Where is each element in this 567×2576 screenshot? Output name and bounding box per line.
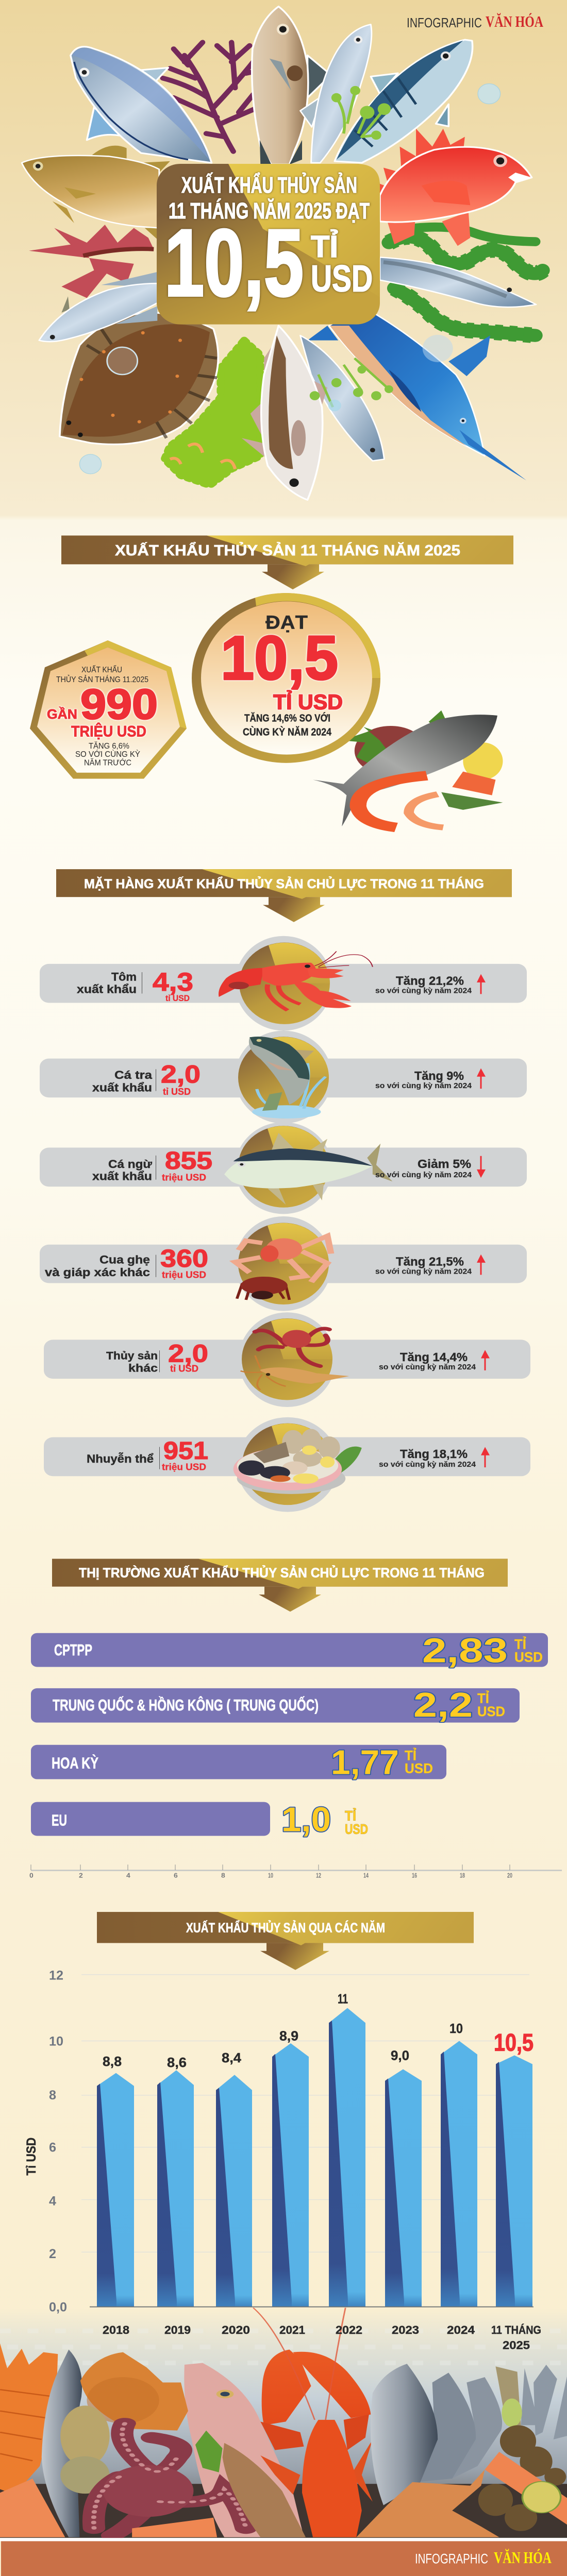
bar 2022 [329, 1991, 365, 2336]
bar: EU [31, 1800, 368, 1839]
row: cua ghẹ và giáp xác khác: 360 [160, 1244, 208, 1272]
heading banner: xuất khẩu thủy sản 11 tháng năm 2025: XUẤT KHẨU THỦY SẢN 11 THÁNG NĂM 2025 [115, 541, 460, 559]
illustration: fish, shrimp and lemon [313, 710, 503, 827]
slim silver top [300, 24, 372, 163]
bar: Trung Quốc và Hồng Kông: 2,2 [413, 1685, 473, 1724]
row: thủy sản khác [44, 1312, 530, 1407]
row: cua ghẹ và giáp xác khác: so với cùng kỳ năm 2024 [375, 1267, 472, 1276]
row: thủy sản khác: so với cùng kỳ năm 2024 [379, 1363, 476, 1371]
arrow up [477, 1255, 486, 1275]
big circle: đạt 10,5 tỉ USD: CÙNG KỲ NĂM 2024 [243, 726, 332, 738]
row: tôm xuất khẩu [40, 936, 527, 1031]
arrow up [477, 1069, 486, 1089]
bar chart: thị trường [29, 1631, 562, 1879]
logo: Infographic Văn Hóa: INFOGRAPHIC [407, 15, 482, 30]
bottom seafood photo [0, 2308, 567, 2538]
oysters [60, 2405, 110, 2466]
title card: TỈ [311, 229, 338, 264]
icon: crabs [235, 1236, 331, 1300]
octopus [94, 2424, 246, 2535]
bar 2021: 8,9 [279, 2028, 298, 2043]
heptagon: tháng 11.2025 gần 990 triệu USD: XUẤT KHẨU [81, 665, 122, 674]
spotted fish [242, 338, 327, 461]
arrow down [477, 1156, 486, 1178]
y axis grid and labels: 2 [49, 2246, 56, 2261]
axis: 4 [126, 1872, 130, 1879]
heading banner: mặt hàng xuất khẩu [56, 869, 512, 922]
icon: tuna [224, 1133, 392, 1205]
row: tôm xuất khẩu: 4,3 [153, 968, 193, 996]
bar: EU: 1,0 [281, 1800, 331, 1839]
arrow up [481, 1350, 490, 1370]
arrow up [477, 974, 486, 994]
bar: CPTPP: USD [514, 1650, 543, 1665]
y axis grid and labels: 0,0 [49, 2300, 67, 2314]
bar: EU: USD [345, 1822, 368, 1837]
bar 2023: 2023 [392, 2324, 419, 2336]
heptagon: tháng 11.2025 gần 990 triệu USD: TRIỆU USD [71, 722, 146, 740]
bar: CPTPP [31, 1631, 548, 1670]
bar 2021: 2021 [279, 2324, 305, 2336]
lime sprig [331, 86, 391, 140]
herbs [195, 2431, 223, 2472]
row: cua ghẹ và giáp xác khác: Cua ghẹ [99, 1253, 150, 1266]
y axis grid and labels [24, 1968, 529, 2314]
axis: 20 [507, 1872, 512, 1879]
salmon mid [132, 2518, 217, 2537]
logo: Infographic Văn Hóa: VĂN HÓA [486, 13, 543, 30]
row: thủy sản khác: Tăng 14,4% [400, 1351, 468, 1364]
bar: Hoa Kỳ: TỈ [405, 1748, 416, 1764]
row: nhuyễn thể [44, 1417, 530, 1512]
antennae [253, 2308, 345, 2420]
arrow up [481, 1447, 490, 1467]
heading banner: thị trường xuất khẩu: THỊ TRƯỜNG XUẤT KHẨU THỦY SẢN CHỦ LỰC TRONG 11 THÁNG [79, 1565, 485, 1580]
bar: EU: TỈ [345, 1808, 356, 1824]
bar 2024 [441, 2021, 477, 2336]
bar 11 tháng 2025: 2025 [503, 2339, 530, 2352]
dark base [0, 2484, 567, 2537]
bar: Hoa Kỳ: 1,77 [331, 1743, 399, 1782]
icon: shellfish bowl [234, 1429, 362, 1494]
bar 2022: 2022 [336, 2324, 362, 2336]
row: nhuyễn thể: 951 [163, 1436, 208, 1464]
bar: Trung Quốc và Hồng Kông: TỈ [477, 1690, 489, 1706]
lime seaweed [164, 341, 260, 485]
axis: 16 [412, 1872, 417, 1879]
seaweed green right [389, 227, 543, 335]
title card: USD [311, 258, 373, 300]
bar: Hoa Kỳ: HOA KỲ [52, 1754, 98, 1772]
row: cá ngừ xuất khẩu: Cá ngừ [108, 1158, 153, 1171]
bar: Hoa Kỳ [31, 1743, 446, 1782]
red fish [376, 129, 465, 199]
pink fish [184, 2363, 304, 2537]
bar: Trung Quốc và Hồng Kông: USD [477, 1704, 505, 1720]
bar: Trung Quốc và Hồng Kông: TRUNG QUỐC & HỒNG KÔNG ( TRUNG QUỐC) [53, 1696, 319, 1714]
bar 11 tháng 2025: 11 THÁNG [491, 2323, 541, 2336]
icon: octopus and squid [241, 1329, 349, 1390]
title card [157, 164, 380, 325]
heptagon: tháng 11.2025 gần 990 triệu USD: TĂNG 6,6% [89, 741, 129, 751]
bar 2020 [216, 2050, 252, 2336]
marlin [308, 326, 338, 341]
panel: hero illustration and title [22, 7, 543, 500]
bar 2024: 10 [449, 2021, 463, 2036]
y axis grid and labels: 12 [49, 1968, 63, 1982]
icon: lobster [219, 951, 373, 1010]
bar 11 tháng 2025 [491, 2029, 541, 2352]
column chart: xuất khẩu qua các năm [24, 1968, 541, 2352]
title card: XUẤT KHẨU THỦY SẢN [181, 172, 357, 197]
heptagon: tháng 11.2025 gần 990 triệu USD: SO VỚI CÙNG KỲ [75, 750, 140, 759]
logo: Infographic Văn Hóa [407, 13, 543, 30]
bar 2019 [157, 2055, 194, 2336]
row: nhuyễn thể: Nhuyễn thể [87, 1452, 154, 1466]
bar 2020: 8,4 [222, 2050, 242, 2065]
bar: EU: EU [52, 1811, 67, 1829]
y axis grid and labels: Tỉ USD [24, 2138, 39, 2176]
row: tôm xuất khẩu: so với cùng kỳ năm 2024 [375, 987, 472, 995]
barracuda [380, 257, 536, 307]
bar 2018: 8,8 [103, 2054, 122, 2069]
y axis grid and labels: 4 [49, 2194, 56, 2208]
bar 2019: 2019 [164, 2324, 191, 2336]
y axis grid and labels: 6 [49, 2140, 56, 2155]
brown fish [223, 2443, 306, 2537]
small fish and lime [495, 2366, 521, 2425]
axis: 18 [460, 1872, 465, 1879]
title card: 11 THÁNG NĂM 2025 ĐẠT [169, 198, 370, 224]
silver fishes right [452, 2377, 502, 2479]
bar 2019: 8,6 [167, 2055, 187, 2070]
row: tôm xuất khẩu: Tôm [111, 970, 137, 984]
row: cá tra xuất khẩu: so với cùng kỳ năm 2024 [375, 1082, 472, 1090]
row: cá ngừ xuất khẩu: Giảm 5% [418, 1158, 471, 1171]
sprigs lower [310, 366, 393, 400]
row: cá tra xuất khẩu: Tăng 9% [414, 1070, 464, 1083]
row: tôm xuất khẩu: xuất khẩu [77, 983, 137, 996]
shrimp stack [0, 2343, 58, 2495]
blue slim fish [102, 272, 157, 324]
bar 2022: 11 [338, 1991, 348, 2006]
row: thủy sản khác: 2,0 [168, 1339, 208, 1367]
axis: 12 [316, 1872, 321, 1879]
heading banner: mặt hàng xuất khẩu: MẶT HÀNG XUẤT KHẨU THỦY SẢN CHỦ LỰC TRONG 11 THÁNG [84, 876, 484, 891]
slim silver bottom [300, 335, 384, 461]
axis: 6 [174, 1872, 178, 1879]
heading banner: qua các năm: XUẤT KHẨU THỦY SẢN QUA CÁC NĂM [186, 1920, 385, 1935]
row: cua ghẹ và giáp xác khác: và giáp xác khác [45, 1266, 150, 1279]
row: cua ghẹ và giáp xác khác [40, 1216, 527, 1311]
bar 11 tháng 2025: 10,5 [494, 2029, 533, 2056]
row: cá ngừ xuất khẩu [40, 1122, 527, 1214]
purple coral [163, 42, 270, 151]
row: cá ngừ xuất khẩu: xuất khẩu [92, 1170, 152, 1183]
tuna top-left [71, 47, 212, 163]
title card: 10,5 [164, 210, 304, 316]
y axis grid and labels: 10 [49, 2034, 63, 2048]
footer bar: INFOGRAPHIC [415, 2551, 488, 2567]
crab [80, 2352, 188, 2431]
row: nhuyễn thể: triệu USD [162, 1462, 206, 1472]
row: cua ghẹ và giáp xác khác: triệu USD [162, 1270, 206, 1280]
axis: 2 [79, 1872, 83, 1879]
big circle: đạt 10,5 tỉ USD: ĐẠT [265, 612, 308, 633]
big circle: đạt 10,5 tỉ USD: 10,5 [221, 624, 338, 693]
heptagon: tháng 11.2025 gần 990 triệu USD: GẦN [47, 707, 77, 722]
row: cá tra xuất khẩu: Cá tra [114, 1069, 153, 1082]
row: thủy sản khác: Thủy sản [106, 1349, 158, 1362]
bar 2023: 9,0 [391, 2048, 409, 2063]
row: cá tra xuất khẩu [40, 1031, 527, 1124]
heading banner: xuất khẩu thủy sản 11 tháng năm 2025 [61, 535, 513, 589]
row: thủy sản khác: tỉ USD [170, 1364, 198, 1374]
big circle: đạt 10,5 tỉ USD: TỈ USD [273, 690, 343, 714]
row: cá tra xuất khẩu: tỉ USD [163, 1087, 191, 1097]
silver fish left [42, 2350, 82, 2537]
axis: 14 [363, 1872, 369, 1879]
axis: 0 [29, 1872, 34, 1879]
row: cá tra xuất khẩu: 2,0 [161, 1060, 201, 1088]
row: cua ghẹ và giáp xác khác: Tăng 21,5% [396, 1255, 464, 1268]
lobster claws [262, 2350, 311, 2425]
bar 2021 [272, 2028, 309, 2336]
bar: CPTPP: CPTPP [54, 1641, 92, 1659]
tan fish [252, 7, 331, 164]
heptagon: tháng 11.2025 gần 990 triệu USD: 990 [80, 680, 158, 728]
row: cá ngừ xuất khẩu: 855 [165, 1146, 212, 1174]
row: tôm xuất khẩu: tỉ USD [165, 994, 190, 1003]
heading banner: thị trường xuất khẩu [52, 1559, 508, 1612]
golden fish [89, 146, 170, 241]
bar: CPTPP: 2,83 [422, 1631, 508, 1670]
fish and seaweed wreath [22, 7, 543, 500]
axis: 8 [221, 1872, 225, 1879]
heptagon: tháng 11.2025 gần 990 triệu USD: THỦY SẢN THÁNG 11.2025 [56, 675, 148, 684]
red seaweed [29, 225, 154, 298]
bar: CPTPP: TỈ [514, 1636, 526, 1652]
salmon right [485, 2452, 567, 2525]
row: thủy sản khác: khác [128, 1362, 158, 1374]
bar 2024: 2024 [447, 2324, 475, 2336]
clams [478, 2425, 566, 2531]
bar 2018 [97, 2054, 134, 2336]
icon: jumping pangasius [249, 1037, 326, 1118]
big circle: đạt 10,5 tỉ USD [192, 593, 380, 763]
flounder [60, 313, 218, 445]
footer bar [0, 2538, 567, 2576]
salmon left [0, 2479, 65, 2537]
y axis grid and labels: 8 [49, 2088, 56, 2103]
heptagon: tháng 11.2025 gần 990 triệu USD: NĂM TRƯỚC [84, 758, 131, 767]
axis [29, 1865, 562, 1879]
row: nhuyễn thể: so với cùng kỳ năm 2024 [379, 1461, 476, 1469]
mackerel [335, 40, 473, 163]
row: nhuyễn thể: Tăng 18,1% [400, 1448, 468, 1461]
row: tôm xuất khẩu: Tăng 21,2% [396, 974, 464, 988]
heading banner: qua các năm [97, 1912, 474, 1970]
bar: Hoa Kỳ: USD [405, 1761, 433, 1776]
bubbles [79, 83, 501, 474]
axis: 10 [268, 1872, 273, 1879]
row: cá ngừ xuất khẩu: triệu USD [162, 1172, 206, 1183]
row: cá ngừ xuất khẩu: so với cùng kỳ năm 2024 [375, 1171, 472, 1179]
lime slice [522, 2482, 561, 2513]
heptagon: tháng 11.2025 gần 990 triệu USD [30, 640, 187, 778]
lobster body [302, 2420, 362, 2537]
bar 2020: 2020 [222, 2324, 250, 2336]
row: cá tra xuất khẩu: xuất khẩu [92, 1081, 152, 1094]
langoustine [356, 2470, 499, 2537]
bar 2018: 2018 [103, 2324, 129, 2336]
bar: Trung Quốc và Hồng Kông [31, 1685, 520, 1724]
bar 2023 [385, 2048, 422, 2336]
big circle: đạt 10,5 tỉ USD: TĂNG 14,6% SO VỚI [244, 712, 330, 724]
